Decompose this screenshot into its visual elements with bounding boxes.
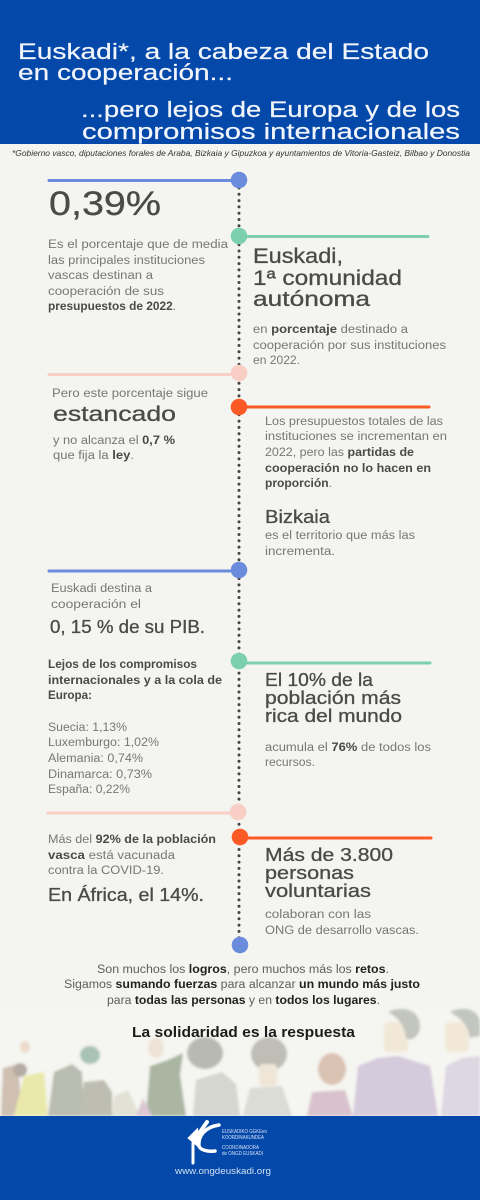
block: Euskadi 1ª comunidad autónoma: 1ª comunidad [253,267,402,290]
footer band [0,1116,480,1200]
illustration: crowd of people [0,1009,480,1120]
block: 0,15 % PIB [50,583,205,637]
block: voluntarias: personas [265,862,354,883]
block: COVID-19: Más del 92% de la población [48,834,216,846]
block: 0,39%: las principales instituciones [48,255,205,267]
logo [191,1122,267,1163]
block: 0,39%: 0,39% [49,185,161,223]
block: voluntarias: Más de 3.800 [265,844,393,865]
block: COVID-19: En África, el 14%. [48,885,204,905]
block: Euskadi 1ª comunidad autónoma: Euskadi, [253,245,343,268]
logo: EUSKADIKO GGKEen [222,1129,267,1135]
block: cola de Europa: Lejos de los compromisos [48,659,197,671]
title: compromisos internacionales [82,119,460,144]
block: estancado: que fija la ley. [53,450,134,462]
closing text: para todas las personas y en todos los lugares . [107,995,380,1007]
title: en cooperación... [18,60,233,85]
block: estancado: estancado [53,403,176,426]
block: El 10%: rica del mundo [265,705,402,726]
header band [0,0,480,144]
block: El 10%: El 10% de la [265,669,374,690]
block: COVID-19: vasca está vacunada [48,850,176,862]
block: voluntarias: ONG de desarrollo vascas. [265,925,419,937]
block: cola de Europa: Luxemburgo: 1,02% [48,737,159,749]
block: estancado: Pero este porcentaje sigue [52,388,208,400]
block: voluntarias [265,844,419,937]
block: 0,39%: presupuestos de 2022 . [48,301,176,313]
block: estancado [52,388,208,462]
block: El 10%: acumula el 76% de todos los [265,742,431,754]
block: cola de Europa: Dinamarca: 0,73% [48,769,152,781]
block: estancado: y no alcanza el 0,7 % [53,435,175,447]
block: 0,15 % PIB: 0, 15 % de su PIB. [50,617,205,637]
block: presupuestos: 2022, pero las partidas de [265,447,414,459]
block: cola de Europa: España: 0,22% [48,784,130,796]
block: 0,15 % PIB: cooperación el [51,599,141,611]
block: presupuestos: Los presupuestos totales de las [265,416,443,428]
block: 0,15 % PIB: Euskadi destina a [51,583,153,595]
closing text [64,964,420,1007]
block: presupuestos [265,416,447,558]
block: voluntarias: voluntarias [265,880,371,901]
block: 0,39%: vascas destinan a [48,270,154,282]
logo: COORDINADORA [222,1145,260,1151]
closing text: Sigamos sumando fuerzas para alcanzar un mundo más justo [64,979,420,991]
block: cola de Europa [48,659,222,796]
block: voluntarias: colaboran con las [265,909,371,921]
block: Euskadi 1ª comunidad autónoma: en porcentaje destinado a [253,324,409,336]
block: 0,39% [48,185,229,313]
block: COVID-19 [48,834,216,905]
block: presupuestos: cooperación no lo hacen en [265,463,431,475]
closing text: Son muchos los logros, pero muchos más los retos. [97,964,389,976]
block: Euskadi 1ª comunidad autónoma: en 2022. [253,355,300,367]
block: Euskadi 1ª comunidad autónoma: cooperación por sus instituciones [253,340,446,352]
timeline [48,172,431,953]
block: cola de Europa: internacionales y a la cola de [48,675,222,687]
block: cola de Europa: Europa: [48,690,92,702]
title: ...pero lejos de Europa y de los [81,97,460,122]
block: El 10%: recursos. [265,757,315,769]
footnote: *Gobierno vasco, diputaciones forales de Araba, Bizkaia y Gipuzkoa y ayuntamientos de Vitoria-Gasteiz, Bilbao y Donostia [12,148,470,158]
block: El 10% [265,669,431,769]
block: cola de Europa: Alemania: 0,74% [48,753,143,765]
block: COVID-19: contra la COVID-19. [48,865,164,877]
slogan: La solidaridad es la respuesta [132,1025,356,1041]
website: www.ongdeuskadi.org [174,1166,271,1177]
title: Euskadi*, a la cabeza del Estado [18,39,429,64]
block: presupuestos: es el territorio que más las [265,530,415,542]
logo: de ONGD EUSKADI [222,1151,263,1157]
title [18,39,460,144]
block: El 10%: población más [265,687,401,708]
block: presupuestos: incrementa. [265,546,335,558]
block: Euskadi 1ª comunidad autónoma [253,245,446,367]
block: presupuestos: Bizkaia [265,507,331,527]
block: Euskadi 1ª comunidad autónoma: autónoma [253,288,370,311]
block: presupuestos: proporción . [265,478,332,490]
logo: KOORDINAKUNDEA [222,1135,265,1141]
block: 0,39%: cooperación de sus [48,286,164,298]
block: presupuestos: instituciones se incrementan en [265,431,447,443]
block: 0,39%: Es el porcentaje que de media [48,239,229,251]
block: cola de Europa: Suecia: 1,13% [48,722,127,734]
